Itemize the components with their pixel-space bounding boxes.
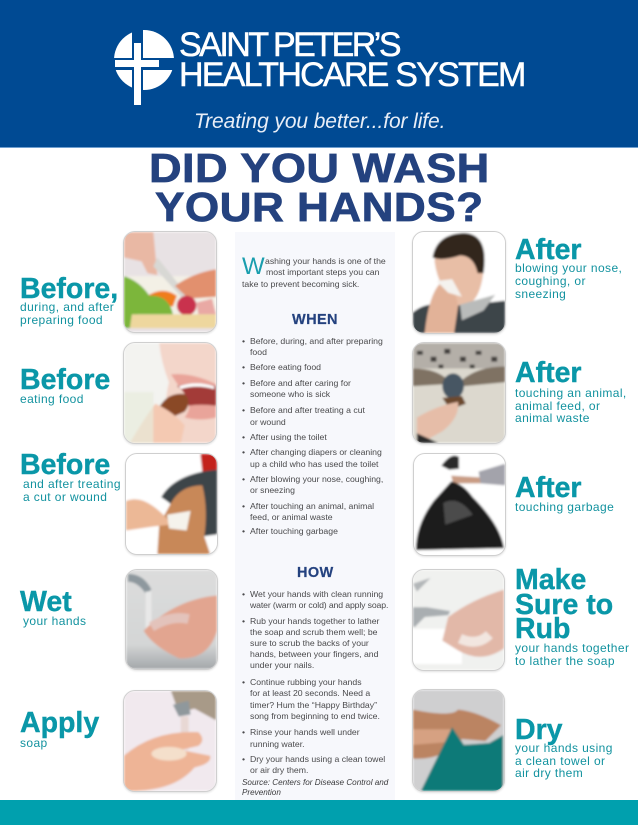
label: dry: a clean towel or bbox=[515, 754, 605, 768]
list: when: After touching garbage bbox=[250, 526, 338, 536]
list: when: • bbox=[242, 526, 245, 536]
list: how: Wet your hands with clean running bbox=[250, 589, 383, 599]
list: when: food bbox=[250, 347, 267, 357]
list: when: feed, or animal waste bbox=[250, 512, 333, 522]
photo: garbage bag bbox=[413, 453, 506, 556]
list: when: Before eating food bbox=[250, 362, 321, 372]
intro text bbox=[242, 253, 386, 289]
list: how: sure to scrub the backs of your bbox=[250, 638, 369, 648]
list: when: After touching an animal, animal bbox=[250, 501, 374, 511]
label: before treating: Before bbox=[20, 449, 110, 481]
organisation name bbox=[179, 26, 525, 94]
label: before preparing food: preparing food bbox=[20, 313, 103, 327]
list: how: • bbox=[242, 589, 245, 599]
label: after garbage: After bbox=[515, 472, 582, 504]
list: when: • bbox=[242, 432, 245, 442]
list: when: • bbox=[242, 474, 245, 484]
label: after blowing nose bbox=[515, 234, 622, 301]
list: how: hands, between your fingers, and bbox=[250, 649, 378, 659]
label: before treating: a cut or wound bbox=[23, 490, 107, 504]
list: when: • bbox=[242, 336, 245, 346]
header band bbox=[0, 0, 638, 148]
photo: preparing food bbox=[123, 231, 217, 333]
label: before eating: eating food bbox=[20, 392, 84, 406]
list: when: • bbox=[242, 501, 245, 511]
title: YOUR HANDS? bbox=[155, 184, 484, 230]
label: after garbage bbox=[515, 472, 614, 514]
list: how: song from beginning to end twice. bbox=[250, 711, 380, 721]
heading: how: HOW bbox=[297, 565, 334, 581]
label: apply: Apply bbox=[20, 707, 99, 739]
list: how: Continue rubbing your hands bbox=[250, 677, 362, 687]
list: how: the soap and scrub them well; be bbox=[250, 627, 378, 637]
intro text: most important steps you can bbox=[266, 267, 379, 277]
label: wet bbox=[20, 586, 86, 628]
photo: drying hands bbox=[412, 689, 505, 792]
label: before treating bbox=[20, 449, 121, 504]
list: when: Before, during, and after preparing bbox=[250, 336, 383, 346]
list: when: Before and after caring for bbox=[250, 378, 351, 388]
list: when: • bbox=[242, 447, 245, 457]
list: when: • bbox=[242, 378, 245, 388]
photo: wet hands bbox=[125, 569, 218, 670]
list: how: running water. bbox=[250, 739, 305, 749]
list: how: • bbox=[242, 677, 245, 687]
organisation name: HEALTHCARE SYSTEM bbox=[179, 56, 525, 94]
list: when: After changing diapers or cleaning bbox=[250, 447, 382, 457]
intro text: ashing your hands is one of the bbox=[265, 256, 386, 266]
list: how: • bbox=[242, 727, 245, 737]
photo: bird and hand bbox=[412, 342, 506, 444]
tagline: Treating you better...for life. bbox=[194, 110, 445, 133]
list: when: After blowing your nose, coughing, bbox=[250, 474, 383, 484]
list: how: Dry your hands using a clean towel bbox=[250, 754, 385, 764]
label: after animal: animal waste bbox=[515, 411, 590, 425]
label: make sure to rub: Make bbox=[515, 564, 586, 596]
photo: eating bbox=[123, 342, 217, 444]
label: before preparing food bbox=[20, 273, 118, 327]
photo: rubbing hands bbox=[412, 569, 505, 671]
label: after animal: touching an animal, bbox=[515, 386, 627, 400]
list: how: • bbox=[242, 754, 245, 764]
list: how: water (warm or cold) and apply soap. bbox=[250, 600, 388, 610]
list: when: Before and after treating a cut bbox=[250, 405, 365, 415]
list: how bbox=[242, 589, 388, 775]
label: wet: Wet bbox=[20, 586, 72, 618]
list: when: After using the toilet bbox=[250, 432, 327, 442]
list: how: for at least 20 seconds. Need a bbox=[250, 688, 370, 698]
label: after blowing nose: blowing your nose, bbox=[515, 261, 622, 275]
organisation name: SAINT PETER’S bbox=[179, 26, 399, 64]
panel: center column bbox=[235, 232, 395, 800]
label: wet: your hands bbox=[23, 614, 86, 628]
photo: bandage on arm bbox=[125, 453, 218, 555]
label: before preparing food: during, and after bbox=[20, 300, 114, 314]
list: when: • bbox=[242, 405, 245, 415]
photo: soap and faucet bbox=[123, 690, 217, 792]
label: after blowing nose: After bbox=[515, 234, 582, 266]
label: before treating: and after treating bbox=[23, 477, 121, 491]
label: make sure to rub: Sure to bbox=[515, 589, 613, 621]
label: before preparing food: Before, bbox=[20, 273, 118, 305]
label: after garbage: touching garbage bbox=[515, 500, 614, 514]
title bbox=[149, 145, 490, 230]
label: after animal: After bbox=[515, 357, 582, 389]
logo: cross in circle bbox=[114, 30, 174, 105]
heading: when: WHEN bbox=[292, 312, 338, 328]
label: dry: air dry them bbox=[515, 766, 583, 780]
list: when: someone who is sick bbox=[250, 389, 330, 399]
label: after blowing nose: coughing, or bbox=[515, 274, 586, 288]
source note bbox=[242, 778, 388, 796]
list: when: • bbox=[242, 362, 245, 372]
label: make sure to rub bbox=[515, 564, 629, 668]
list: how: Rub your hands together to lather bbox=[250, 616, 379, 626]
list: when: up a child who has used the toilet bbox=[250, 459, 378, 469]
intro text: take to prevent becoming sick. bbox=[242, 279, 359, 289]
footer band bbox=[0, 800, 638, 825]
list: when: or sneezing bbox=[250, 485, 295, 495]
source note: Prevention bbox=[242, 788, 281, 796]
photo: man sneezing bbox=[412, 231, 506, 334]
title: DID YOU WASH bbox=[149, 145, 490, 191]
list: how: Rinse your hands well under bbox=[250, 727, 360, 737]
label: before eating: Before bbox=[20, 364, 110, 396]
label: after animal bbox=[515, 357, 627, 425]
label: apply: soap bbox=[20, 736, 48, 750]
label: make sure to rub: to lather the soap bbox=[515, 654, 615, 668]
drop cap: W bbox=[242, 253, 265, 280]
list: how: timer? Hum the “Happy Birthday” bbox=[250, 700, 377, 710]
label: dry: Dry bbox=[515, 714, 563, 746]
label: dry: your hands using bbox=[515, 741, 613, 755]
list: how: under your nails. bbox=[250, 660, 314, 670]
list: when bbox=[242, 336, 383, 536]
label: after blowing nose: sneezing bbox=[515, 287, 566, 301]
list: how: or air dry them. bbox=[250, 765, 308, 775]
label: dry bbox=[515, 714, 613, 780]
list: how: • bbox=[242, 616, 245, 626]
source note: Source: Centers for Disease Control and bbox=[242, 778, 388, 787]
list: when: or wound bbox=[250, 417, 286, 427]
label: after animal: animal feed, or bbox=[515, 399, 600, 413]
label: make sure to rub: your hands together bbox=[515, 641, 629, 655]
label: make sure to rub: Rub bbox=[515, 613, 570, 645]
